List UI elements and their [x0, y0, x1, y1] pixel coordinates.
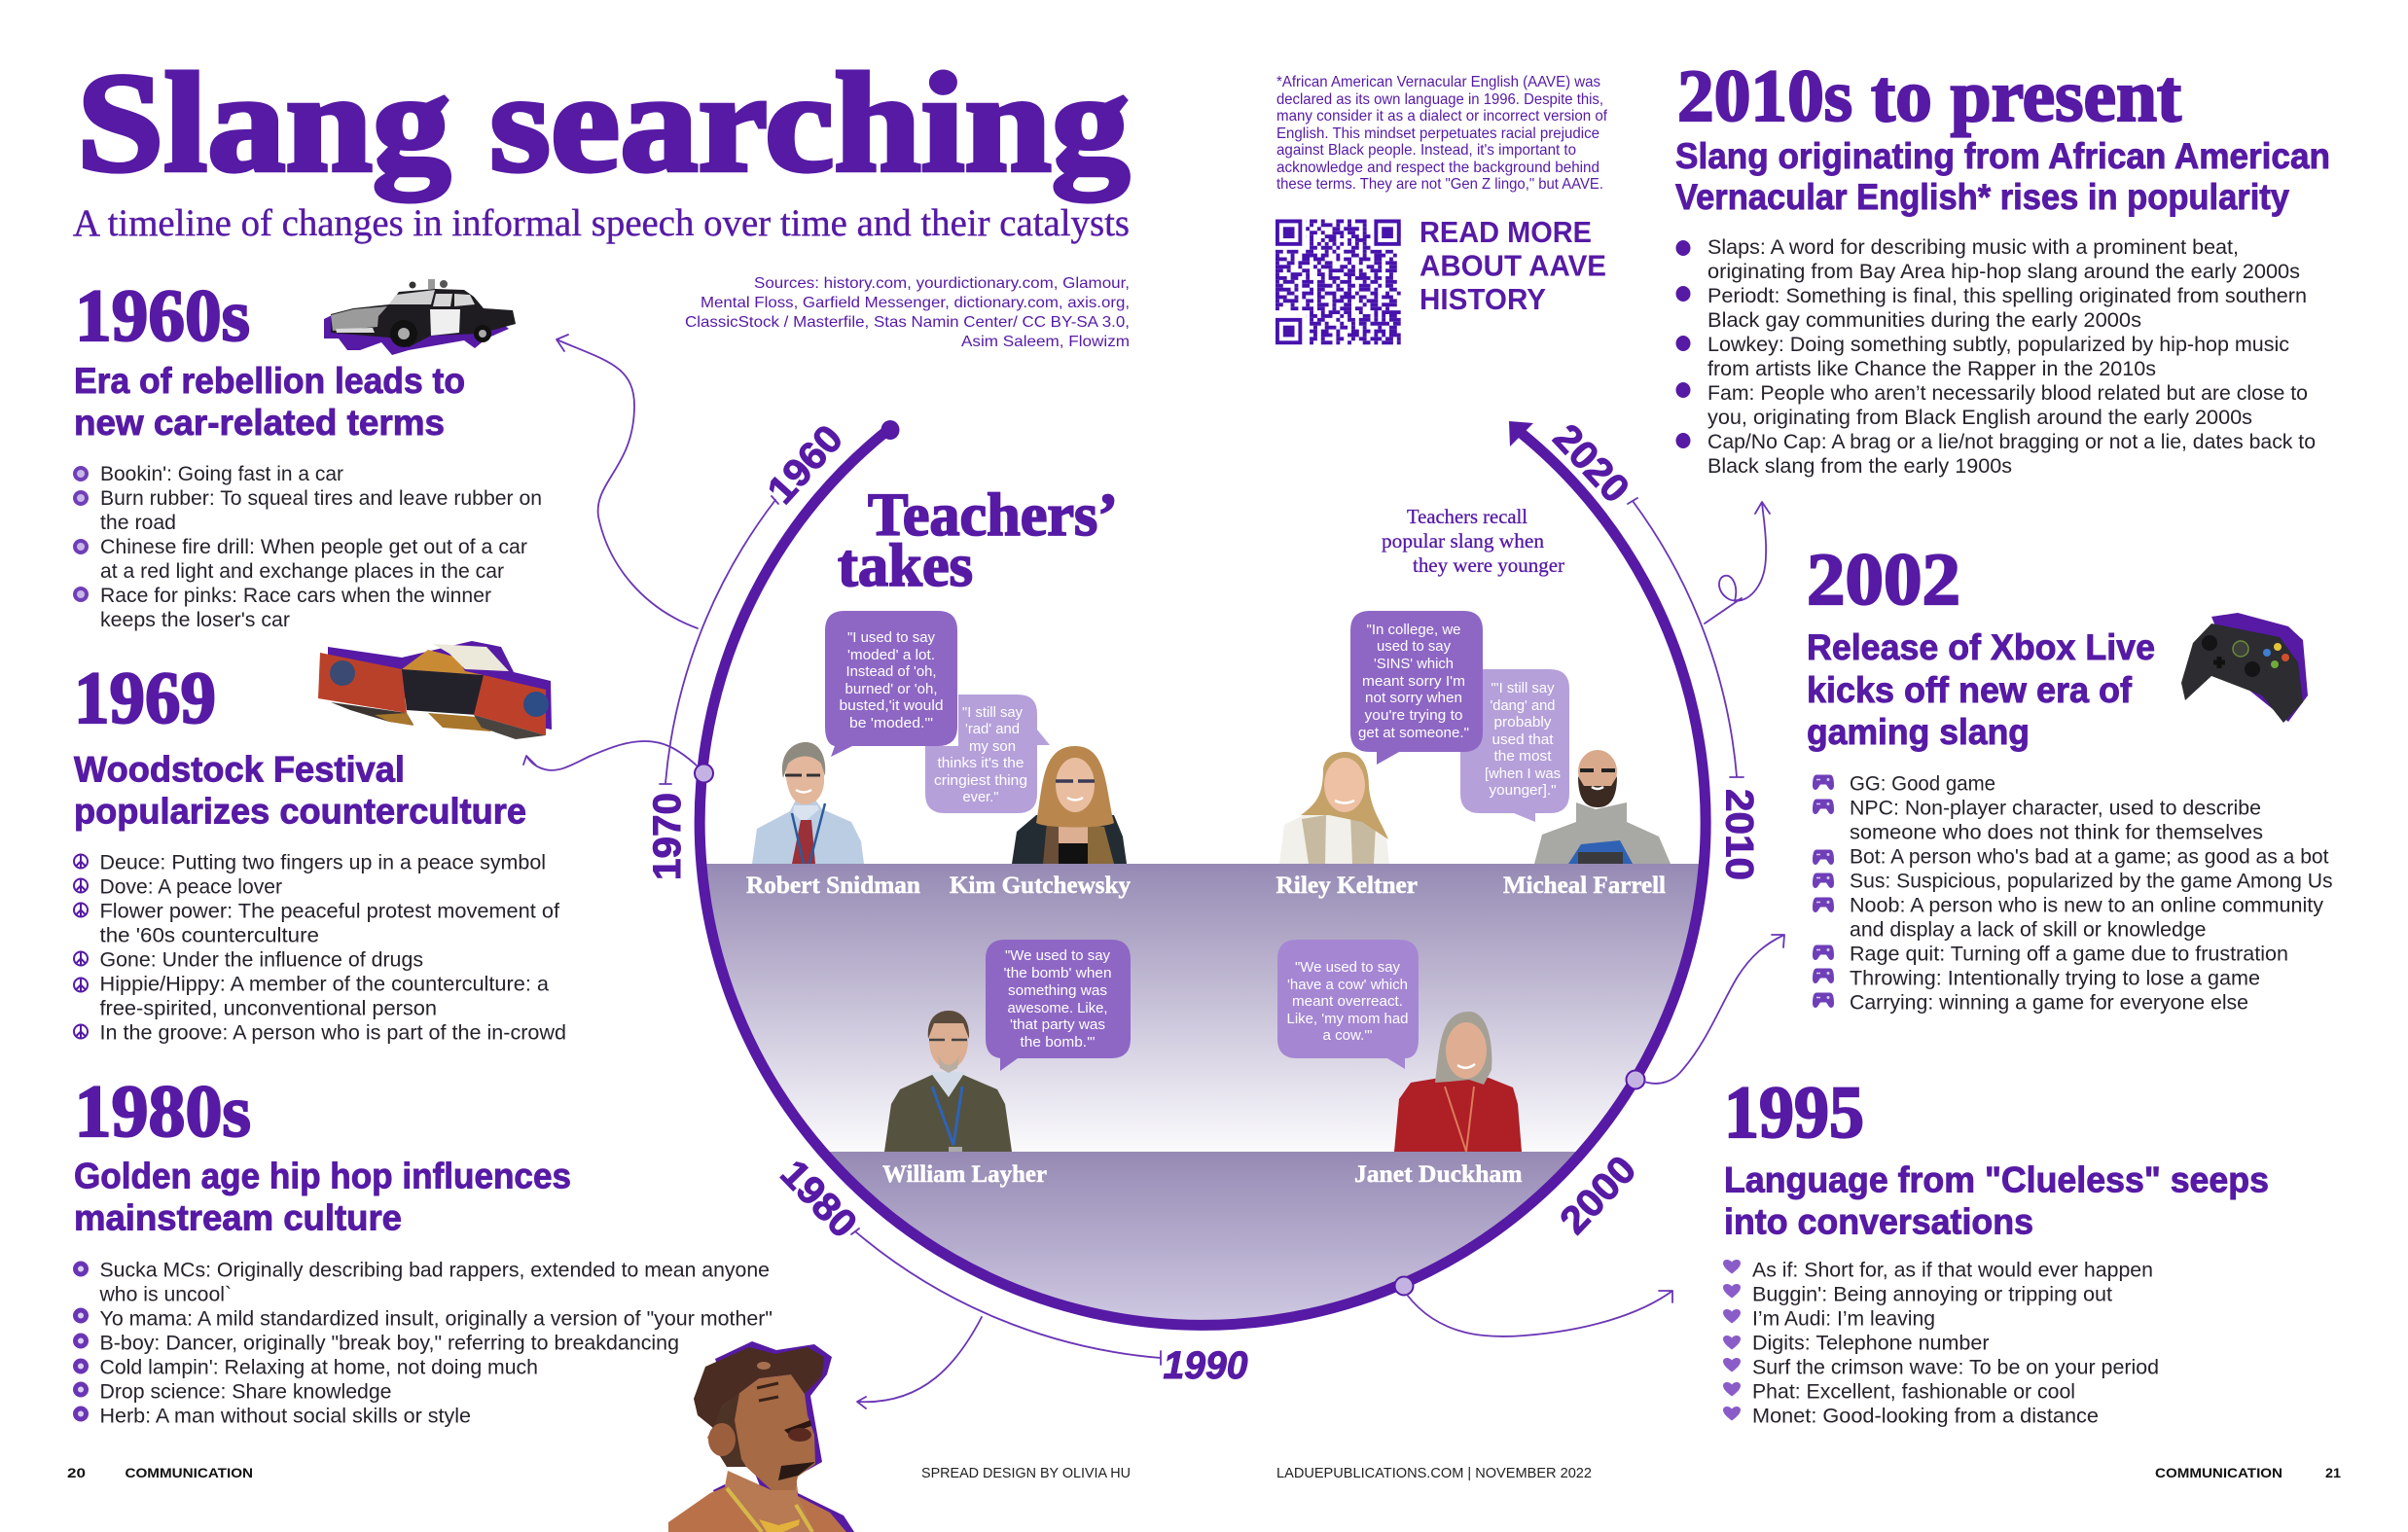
panel: AAVE note	[1276, 74, 1608, 344]
subheading: mainstream culture	[74, 1198, 402, 1237]
slang list 2010s: Black slang from the early 1900s	[1707, 455, 2012, 478]
slang list 1960s: at a red light and exchange places in the car	[100, 560, 504, 583]
arrow: to 1980s	[857, 1317, 982, 1408]
slang list 1980s: Drop science: Share knowledge	[99, 1381, 391, 1403]
image: rapper portrait	[668, 1341, 854, 1532]
subheading: new car-related terms	[74, 403, 445, 443]
subheading: Language from "Clueless" seeps	[1724, 1159, 2269, 1200]
names row two: Janet Duckham	[1354, 1161, 1523, 1188]
slang list 2002: Carrying: winning a game for everyone else	[1850, 992, 2248, 1014]
heading: Teachers' takes	[838, 482, 1118, 599]
milestone dot: 1995	[1395, 1276, 1413, 1296]
bubble text: Robert's quote	[839, 629, 944, 731]
arrowhead: 2020	[1509, 421, 1533, 446]
bubble: Riley's quote: you're trying to	[1364, 707, 1463, 724]
photo: Robert Snidman	[752, 742, 864, 864]
slang list 1969	[74, 852, 566, 1045]
names row two: William Layher	[882, 1161, 1047, 1188]
read more callout: HISTORY	[1420, 282, 1546, 316]
slang list 2002: Noob: A person who is new to an online community	[1850, 895, 2324, 916]
footer left: COMMUNICATION	[125, 1466, 253, 1480]
intro text	[1382, 505, 1564, 577]
heading: Teachers' takes: Teachers’	[868, 482, 1118, 549]
bubble text: Robert's quote: Instead of 'oh,	[846, 663, 936, 680]
slang list 1980s: B-boy: Dancer, originally "break boy," referring to breakdancing	[99, 1333, 679, 1354]
start dot: 1960	[881, 420, 899, 440]
icon: Xbox controller	[2181, 613, 2308, 723]
decade labels: 1980	[773, 1152, 865, 1246]
slang list 2002: Rage quit: Turning off a game due to frustration	[1850, 944, 2288, 965]
year heading 1969: 1969	[74, 658, 216, 739]
subheading: gaming slang	[1807, 712, 2030, 752]
photo: William Layher	[884, 1011, 1012, 1152]
bubble: Janet's quote: "We used to say	[1295, 959, 1400, 976]
arrow: to 1995	[1407, 1291, 1672, 1336]
subheading: Release of Xbox Live	[1807, 627, 2155, 667]
year heading 1995: 1995	[1724, 1072, 1864, 1154]
bubble: Kim's quote: "I still say	[962, 704, 1023, 721]
panel: teachers' takes circle	[681, 482, 1732, 1333]
slang list 1995: I’m Audi: I’m leaving	[1752, 1307, 1935, 1331]
footnote text: many consider it as a dialect or incorrect version of	[1276, 108, 1608, 125]
names row one: Riley Keltner	[1276, 873, 1418, 899]
sources: ClassicStock / Masterfile, Stas Namin Center/ CC BY-SA 3.0,	[685, 314, 1130, 331]
slang list 1969: Deuce: Putting two fingers up in a peace symbol	[99, 852, 546, 873]
bubble: Janet's quote: meant overreact.	[1292, 993, 1403, 1010]
slang list 2010s: Slaps: A word for describing music with a prominent beat,	[1707, 236, 2239, 259]
bubble: Riley's quote	[1350, 611, 1483, 765]
year heading 2010s: 2010s to present	[1677, 55, 2181, 137]
footnote text	[1276, 74, 1608, 193]
panel: 2010s to present	[1675, 55, 2330, 478]
footer left	[67, 1466, 253, 1480]
slang list 1960s: Chinese fire drill: When people get out of a car	[100, 536, 527, 558]
slang list 1980s: Yo mama: A mild standardized insult, originally a version of "your mother"	[99, 1307, 773, 1331]
slang list 1995: Digits: Telephone number	[1752, 1333, 1989, 1354]
slang list 1969: the '60s counterculture	[99, 924, 319, 947]
slang list 1969: Dove: A peace lover	[99, 875, 282, 899]
footnote text: these terms. They are not "Gen Z lingo," but AAVE.	[1276, 176, 1603, 193]
footer credit: SPREAD DESIGN BY OLIVIA HU	[921, 1465, 1131, 1481]
bubble: Riley's quote: not sorry when	[1365, 690, 1462, 706]
footer right: COMMUNICATION	[2155, 1466, 2282, 1480]
footnote text: acknowledge and respect the background behind	[1276, 160, 1599, 176]
bubble: William's quote: "We used to say	[1005, 947, 1110, 964]
decade labels	[646, 416, 1761, 1387]
subheading: Slang originating from African American	[1675, 136, 2330, 176]
footnote text: *African American Vernacular English (AAVE) was	[1276, 74, 1600, 90]
slang list 1980s: Herb: A man without social skills or style	[99, 1405, 471, 1428]
bubble: William's quote: the bomb.'"	[1020, 1034, 1096, 1051]
footer right	[2155, 1466, 2342, 1480]
slang list 1969: Hippie/Hippy: A member of the counterculture: a	[99, 973, 549, 996]
icon: police car	[324, 279, 516, 355]
bubble: Micheal's quote: probably	[1494, 714, 1552, 730]
decade labels: 1960	[760, 417, 851, 513]
bubble: Riley's quote: 'SINS' which	[1374, 656, 1454, 672]
footnote text: against Black people. Instead, it's important to	[1276, 142, 1576, 159]
subheading: Woodstock Festival	[74, 749, 405, 790]
bubble: William's quote: 'the bomb' when	[1004, 965, 1111, 981]
slang list 2010s: Black gay communities during the early 2000s	[1707, 309, 2141, 332]
slang list 2002: Throwing: Intentionally trying to lose a game	[1850, 967, 2260, 990]
footnote text: declared as its own language in 1996. Despite this,	[1276, 91, 1603, 108]
slang list 2010s: Fam: People who aren’t necessarily blood related but are close to	[1707, 382, 2308, 405]
bubble: Riley's quote: get at someone."	[1358, 725, 1469, 741]
slang list 1980s: Cold lampin': Relaxing at home, not doing much	[99, 1356, 538, 1379]
bubble: Janet's quote: 'have a cow' which	[1287, 977, 1408, 993]
bubble: Kim's quote: 'rad' and	[965, 721, 1020, 737]
photo: Kim Gutchewsky	[1012, 746, 1127, 864]
bubble: Riley's quote: meant sorry I'm	[1362, 673, 1465, 690]
arrow: to 2002	[1644, 935, 1784, 1084]
panel: 2002	[1807, 539, 2333, 1014]
names row two	[882, 1161, 1523, 1188]
decade labels: 1990	[1164, 1344, 1247, 1387]
bubble: Micheal's quote: used that	[1492, 731, 1554, 748]
slang list 1969: Gone: Under the influence of drugs	[99, 949, 423, 971]
bubble: Kim's quote: my son	[969, 738, 1016, 755]
panel: 1995	[1723, 1072, 2269, 1428]
slang list 1980s: who is uncool`	[98, 1284, 232, 1305]
subheading: kicks off new era of	[1807, 670, 2133, 710]
bubble: William's quote: awesome. Like,	[1008, 1000, 1107, 1016]
slang list 2010s: Lowkey: Doing something subtly, popularized by hip-hop music	[1707, 334, 2289, 356]
photo: Micheal Farrell	[1534, 750, 1671, 864]
subheading: Vernacular English* rises in popularity	[1675, 177, 2289, 217]
slang list 2002	[1813, 772, 2333, 1014]
photo: Janet Duckham	[1394, 1012, 1522, 1152]
arrow: to 2010s	[1705, 502, 1770, 623]
slang list 2002: NPC: Non-player character, used to describe	[1850, 798, 2261, 819]
slang list 1995: Monet: Good-looking from a distance	[1752, 1405, 2099, 1428]
subheading	[1675, 136, 2330, 217]
subtitle: A timeline of changes in informal speech over time and their catalysts	[73, 202, 1130, 244]
bubble: Kim's quote: thinks it's the	[938, 755, 1024, 771]
subheading: popularizes counterculture	[74, 792, 526, 831]
subheading	[74, 361, 465, 443]
milestone dot: 1969	[695, 765, 713, 782]
slang list 2010s: from artists like Chance the Rapper in the 2010s	[1707, 358, 2156, 380]
slang list 1969: In the groove: A person who is part of the in-crowd	[99, 1021, 566, 1045]
sources: Asim Saleem, Flowizm	[961, 334, 1130, 350]
title: Slang searching	[77, 44, 1130, 201]
bubble: Micheal's quote: younger]."	[1489, 782, 1557, 799]
read more callout	[1420, 215, 1606, 316]
decade labels: 2020	[1545, 416, 1637, 511]
intro text: Teachers recall	[1407, 505, 1527, 528]
bubble: Janet's quote: a cow.'"	[1323, 1027, 1372, 1044]
subheading	[74, 749, 526, 831]
bubble: William's quote	[986, 940, 1131, 1071]
sources: Mental Floss, Garfield Messenger, dictionary.com, axis.org,	[701, 295, 1130, 311]
decade labels: 2000	[1552, 1148, 1644, 1242]
bubble: Kim's quote: ever."	[963, 789, 998, 805]
timeline ring	[695, 420, 1706, 1325]
footer right: 21	[2325, 1466, 2342, 1480]
panel: 1969	[74, 641, 566, 1045]
decade labels: 2010	[1718, 789, 1761, 880]
names row one: Kim Gutchewsky	[950, 873, 1131, 899]
bubble: Robert's quote	[825, 611, 957, 757]
bubble: Riley's quote: used to say	[1377, 638, 1451, 655]
footer publication: LADUEPUBLICATIONS.COM | NOVEMBER 2022	[1276, 1465, 1592, 1481]
slang list 2010s: Periodt: Something is final, this spelling originated from southern	[1707, 285, 2307, 307]
image: Woodstock posters	[318, 641, 552, 739]
subheading: Golden age hip hop influences	[74, 1156, 571, 1196]
slang list 1969: free-spirited, unconventional person	[99, 998, 437, 1019]
slang list 2002: and display a lack of skill or knowledge	[1850, 918, 2207, 942]
names row one: Micheal Farrell	[1503, 873, 1666, 899]
sources	[685, 275, 1130, 350]
bubble text: Robert's quote: be 'moded.'"	[849, 715, 933, 731]
bubble: Riley's quote: "In college, we	[1366, 622, 1461, 638]
bubble: Micheal's quote	[1460, 669, 1569, 822]
bubble: Micheal's quote: [when I was	[1485, 766, 1561, 782]
bubble text: Robert's quote: "I used to say	[847, 629, 935, 646]
bubble text: Robert's quote: 'moded' a lot.	[847, 647, 935, 663]
bubble: William's quote: 'that party was	[1010, 1016, 1105, 1033]
slang list 1969: Flower power: The peaceful protest movement of	[99, 901, 559, 922]
slang list 1995: Buggin': Being annoying or tripping out	[1752, 1284, 2112, 1305]
panel: 1980s	[73, 1071, 773, 1428]
milestone dot: 2000s	[1627, 1070, 1644, 1089]
subheading	[74, 1156, 571, 1237]
slang list 2010s: originating from Bay Area hip-hop slang around the early 2000s	[1707, 261, 2300, 283]
slang list 1960s	[73, 463, 542, 631]
intro text: popular slang when	[1382, 529, 1545, 552]
slang list 2010s: you, originating from Black English around the early 2000s	[1707, 407, 2252, 429]
thin decade arcs	[660, 496, 1743, 1365]
bubble: Micheal's quote: "'I still say	[1491, 680, 1555, 696]
bubble text: Robert's quote: busted,'it would	[839, 697, 944, 714]
slang list 2002: Bot: A person who's bad at a game; as good as a bot	[1850, 846, 2329, 868]
subheading: into conversations	[1724, 1202, 2033, 1241]
slang list 2010s: Cap/No Cap: A brag or a lie/not bragging or not a lie, dates back to	[1707, 431, 2316, 453]
year heading 1980s: 1980s	[74, 1071, 251, 1153]
slang list 2002: Sus: Suspicious, popularized by the game Among Us	[1850, 870, 2333, 893]
bubble: Janet's quote: Like, 'my mom had	[1286, 1011, 1409, 1027]
slang list 1980s: Sucka MCs: Originally describing bad rappers, extended to mean anyone	[99, 1259, 770, 1282]
bubble: Micheal's quote: the most	[1494, 748, 1552, 765]
bubble: Janet's quote	[1277, 940, 1419, 1069]
slang list 1960s: Burn rubber: To squeal tires and leave rubber on	[100, 487, 542, 510]
slang list 1960s: Bookin': Going fast in a car	[100, 463, 343, 485]
slang list 1995: Surf the crimson wave: To be on your period	[1752, 1356, 2159, 1379]
QR code	[1276, 220, 1401, 344]
bubble: Micheal's quote: 'dang' and	[1491, 697, 1555, 714]
slang list 1995: As if: Short for, as if that would ever happen	[1752, 1259, 2153, 1282]
bubble: William's quote: something was	[1008, 982, 1107, 999]
footnote text: English. This mindset perpetuates racial prejudice	[1276, 125, 1599, 142]
slang list 2002: someone who does not think for themselves	[1850, 821, 2263, 844]
subheading	[1807, 627, 2155, 752]
slang list 2010s	[1675, 236, 2316, 478]
year heading 1960s: 1960s	[75, 275, 250, 357]
slang list 1995: Phat: Excellent, fashionable or cool	[1752, 1381, 2075, 1403]
slang list 1960s: Race for pinks: Race cars when the winner	[100, 585, 491, 607]
slang list 1995	[1723, 1259, 2159, 1428]
year heading 2002: 2002	[1807, 539, 1960, 621]
arrow: to 1960s	[557, 335, 698, 628]
read more callout: ABOUT AAVE	[1420, 249, 1606, 282]
slang list 2002: GG: Good game	[1850, 772, 1995, 796]
bubble text: Robert's quote: burned' or 'oh,	[845, 681, 938, 697]
decade labels: 1970	[646, 793, 689, 880]
sources: Sources: history.com, yourdictionary.com, Glamour,	[754, 275, 1130, 292]
names row one	[746, 873, 1666, 899]
subheading	[1724, 1159, 2269, 1241]
bubble: Kim's quote: cringiest thing	[934, 772, 1027, 789]
photo: Riley Keltner	[1279, 752, 1389, 864]
slang list 1980s	[73, 1259, 773, 1428]
bubble: Kim's quote	[925, 695, 1050, 813]
footer left: 20	[67, 1466, 86, 1480]
slang list 1960s: the road	[100, 512, 176, 534]
names row one: Robert Snidman	[746, 873, 920, 899]
subheading: Era of rebellion leads to	[74, 361, 465, 401]
heading: Teachers' takes: takes	[838, 533, 973, 599]
slang list 1960s: keeps the loser's car	[100, 609, 290, 631]
gradient bands	[681, 864, 1732, 1333]
read more callout: READ MORE	[1420, 215, 1592, 249]
panel: 1960s	[73, 275, 542, 631]
arrow: to 1969	[523, 741, 697, 770]
intro text: they were younger	[1413, 553, 1564, 577]
